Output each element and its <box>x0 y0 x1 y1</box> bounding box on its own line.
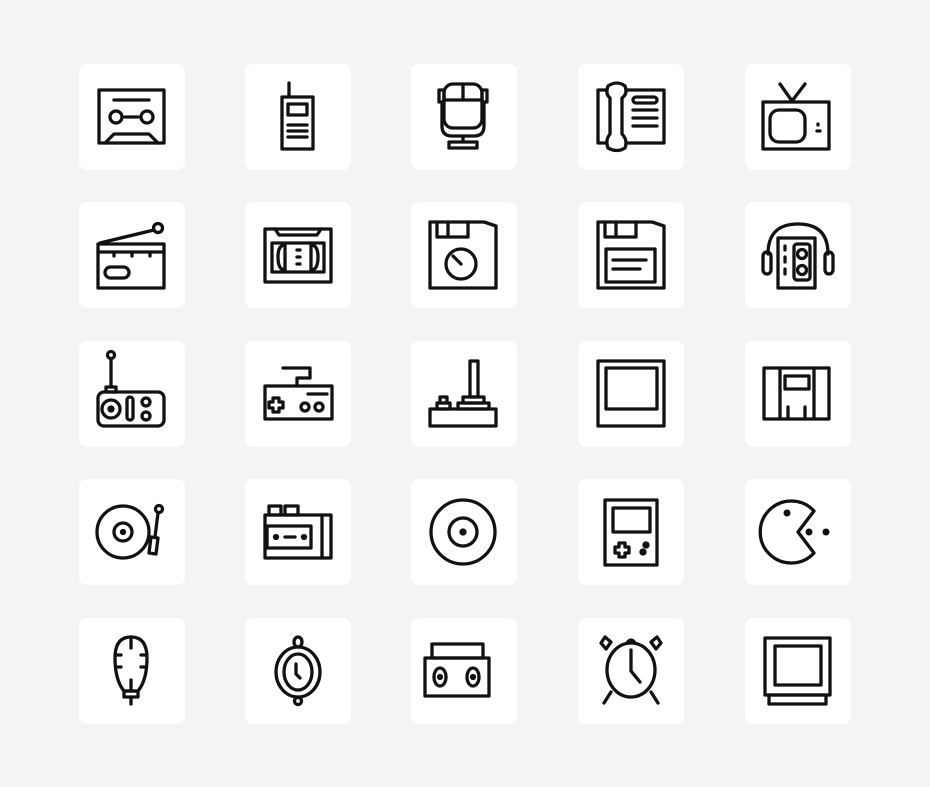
icon: handheld game console <box>578 479 684 585</box>
icon: studio microphone <box>411 64 517 170</box>
icon: turntable <box>79 479 185 585</box>
icon: vinyl record <box>411 479 517 585</box>
icon: transistor radio <box>79 202 185 308</box>
icon: walkie talkie <box>245 64 351 170</box>
icon: crt monitor <box>745 618 851 724</box>
icon: alarm clock <box>578 618 684 724</box>
icon: boombox <box>411 618 517 724</box>
icon: telephone <box>578 64 684 170</box>
icon: floppy disk label <box>578 202 684 308</box>
icon: joystick <box>411 341 517 447</box>
icon: tape recorder <box>245 479 351 585</box>
icon: portable radio <box>79 341 185 447</box>
icon: VHS tape <box>245 202 351 308</box>
icon: gamepad <box>245 341 351 447</box>
icon: polaroid <box>578 341 684 447</box>
icon: pac-man <box>745 479 851 585</box>
icon: television <box>745 64 851 170</box>
icon: pocket watch <box>245 618 351 724</box>
icon: headphones walkman <box>745 202 851 308</box>
icon: cassette tape <box>79 64 185 170</box>
icon: vintage microphone <box>79 618 185 724</box>
icon: game cartridge <box>745 341 851 447</box>
icon: floppy disk dial <box>411 202 517 308</box>
